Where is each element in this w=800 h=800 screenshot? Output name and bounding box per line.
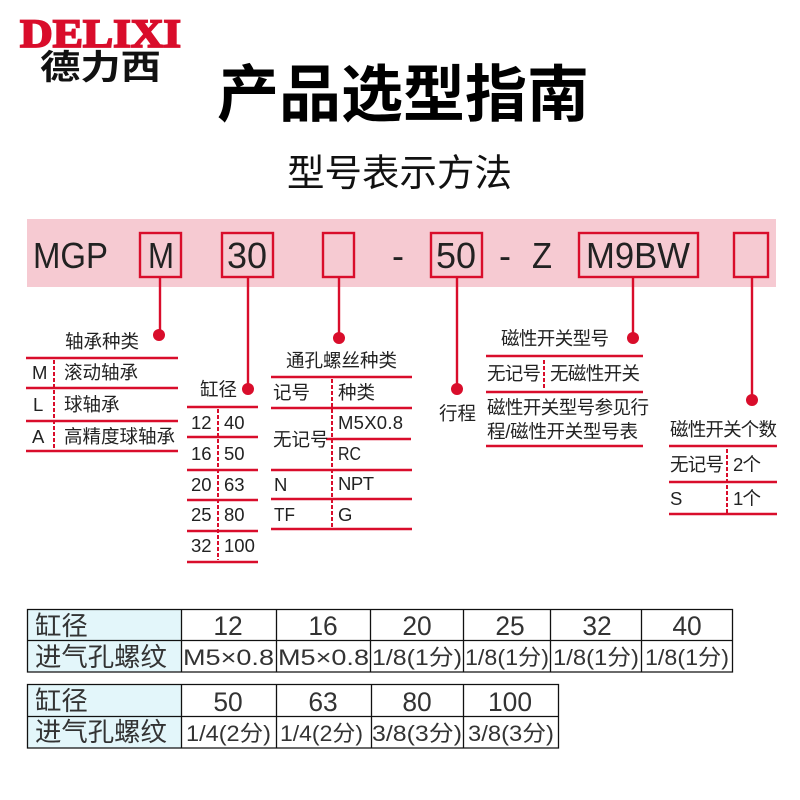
panel: bore table: 32 (191, 535, 212, 556)
panel: bore table: 80 (224, 504, 245, 525)
panel: port thread table, bores 12 to 40: 16 (308, 611, 338, 641)
panel: bore table: 16 (191, 443, 212, 464)
leader: stroke (451, 278, 463, 395)
panel: bearing type table: A (32, 426, 45, 447)
panel: bore table (187, 379, 258, 562)
panel: port thread type table: G (338, 504, 352, 525)
panel: model code band: - (392, 235, 404, 276)
panel: port thread table, bores 50 to 100: 80 (402, 687, 432, 717)
panel: bore table: 20 (191, 474, 212, 495)
panel: port thread table, bores 50 to 100 (28, 684, 558, 748)
panel: bearing type table: 轴承种类 (65, 331, 139, 352)
panel: model code band: Z (532, 235, 552, 276)
panel: bore table: 缸径 (200, 379, 237, 400)
panel: port thread table, bores 12 to 40: 1/8(1分) (553, 645, 639, 670)
panel: port thread table, bores 50 to 100: 3/8(3分) (372, 721, 462, 746)
panel: model code band: M9BW (586, 235, 690, 276)
leader: magnetic switch count (746, 278, 758, 406)
panel: port thread type table: N (274, 474, 287, 495)
logo: DELIXI: DELIXI (20, 11, 181, 56)
logo: DELIXI: 德力西 (40, 49, 161, 87)
panel: port thread type table: M5X0.8 (338, 412, 403, 433)
panel: port thread table, bores 50 to 100: 1/4(2分) (186, 721, 271, 746)
panel: bearing type table (26, 331, 178, 451)
panel: magnetic switch count table: 磁性开关个数 (670, 419, 777, 440)
panel: port thread type table: 无记号 (273, 429, 329, 450)
panel: port thread table, bores 50 to 100: 1/4(2分) (280, 721, 363, 746)
label: stroke: 行程 (439, 403, 476, 424)
leader: port thread type (333, 278, 345, 344)
leader: bore (242, 278, 254, 395)
panel: port thread table, bores 12 to 40: 32 (582, 611, 612, 641)
panel: port thread table, bores 50 to 100: 100 (488, 687, 532, 717)
panel: model code band: MGP (33, 235, 108, 276)
panel: magnetic switch count table: 无记号 (670, 454, 724, 475)
panel: bearing type table: 滚动轴承 (64, 362, 138, 383)
panel: model code band (27, 219, 776, 287)
panel: magnetic switch count table: S (670, 488, 682, 509)
panel: port thread table, bores 12 to 40: 1/8(1分) (465, 645, 549, 670)
panel: magnetic switch count table (669, 419, 777, 514)
panel: port thread table, bores 12 to 40: 12 (213, 611, 243, 641)
panel: port thread type table: TF (274, 504, 295, 525)
panel: magnetic switch model table: 磁性开关型号参见行 (487, 397, 649, 418)
panel: magnetic switch count table: 2个 (733, 454, 761, 475)
panel: model code band: 30 (227, 235, 267, 276)
panel: magnetic switch count table: 1个 (733, 488, 761, 509)
panel: bore table: 50 (224, 443, 245, 464)
leader: magnetic switch model (627, 278, 639, 344)
panel: port thread type table: RC (338, 443, 361, 464)
panel: port thread type table: 种类 (338, 382, 375, 403)
panel: magnetic switch model table (486, 328, 649, 446)
panel: bore table: 100 (224, 535, 255, 556)
panel: port thread table, bores 12 to 40: 20 (402, 611, 432, 641)
leader: bearing type (153, 278, 165, 341)
panel: port thread table, bores 50 to 100: 缸径 (35, 686, 88, 716)
panel: magnetic switch model table: 程/磁性开关型号表 (487, 421, 638, 442)
panel: magnetic switch model table: 无磁性开关 (550, 363, 640, 384)
logo: DELIXI (20, 11, 181, 87)
panel: model code band: M (148, 235, 174, 276)
panel: bore table: 12 (191, 412, 212, 433)
panel: port thread type table: 记号 (273, 382, 310, 403)
panel: bore table: 25 (191, 504, 212, 525)
panel: port thread table, bores 12 to 40: 缸径 (35, 611, 88, 641)
panel: model code band: - (499, 235, 511, 276)
panel: port thread table, bores 12 to 40: 40 (672, 611, 702, 641)
panel: port thread table, bores 12 to 40: 进气孔螺纹 (35, 642, 167, 672)
panel: port thread table, bores 12 to 40: 1/8(1分) (645, 645, 729, 670)
panel: bore table: 63 (224, 474, 245, 495)
panel: port thread table, bores 12 to 40: M5×0.8 (183, 645, 274, 670)
panel: magnetic switch model table: 无记号 (487, 363, 541, 384)
panel: bore table: 40 (224, 412, 245, 433)
panel: port thread table, bores 50 to 100: 50 (213, 687, 243, 717)
panel: port thread table, bores 50 to 100: 进气孔螺纹 (35, 717, 167, 747)
panel: model code band: 50 (436, 235, 476, 276)
panel: bearing type table: 球轴承 (64, 394, 120, 415)
panel: port thread table, bores 12 to 40: M5×0.8 (278, 645, 369, 670)
panel: bearing type table: L (33, 394, 43, 415)
panel: port thread type table: 通孔螺丝种类 (286, 350, 397, 371)
subtitle: 型号表示方法 (287, 152, 512, 194)
panel: magnetic switch model table: 磁性开关型号 (501, 328, 609, 349)
panel: port thread type table: NPT (338, 473, 374, 494)
panel: port thread table, bores 50 to 100: 3/8(3分) (468, 721, 554, 746)
panel: port thread type table (271, 350, 412, 529)
panel: port thread table, bores 12 to 40 (28, 610, 732, 672)
title: 产品选型指南 (217, 61, 589, 130)
panel: port thread table, bores 12 to 40: 1/8(1分) (372, 645, 462, 670)
panel: port thread table, bores 50 to 100: 63 (308, 687, 338, 717)
panel: bearing type table: M (32, 362, 47, 383)
panel: bearing type table: 高精度球轴承 (64, 426, 175, 447)
panel: port thread table, bores 12 to 40: 25 (495, 611, 525, 641)
